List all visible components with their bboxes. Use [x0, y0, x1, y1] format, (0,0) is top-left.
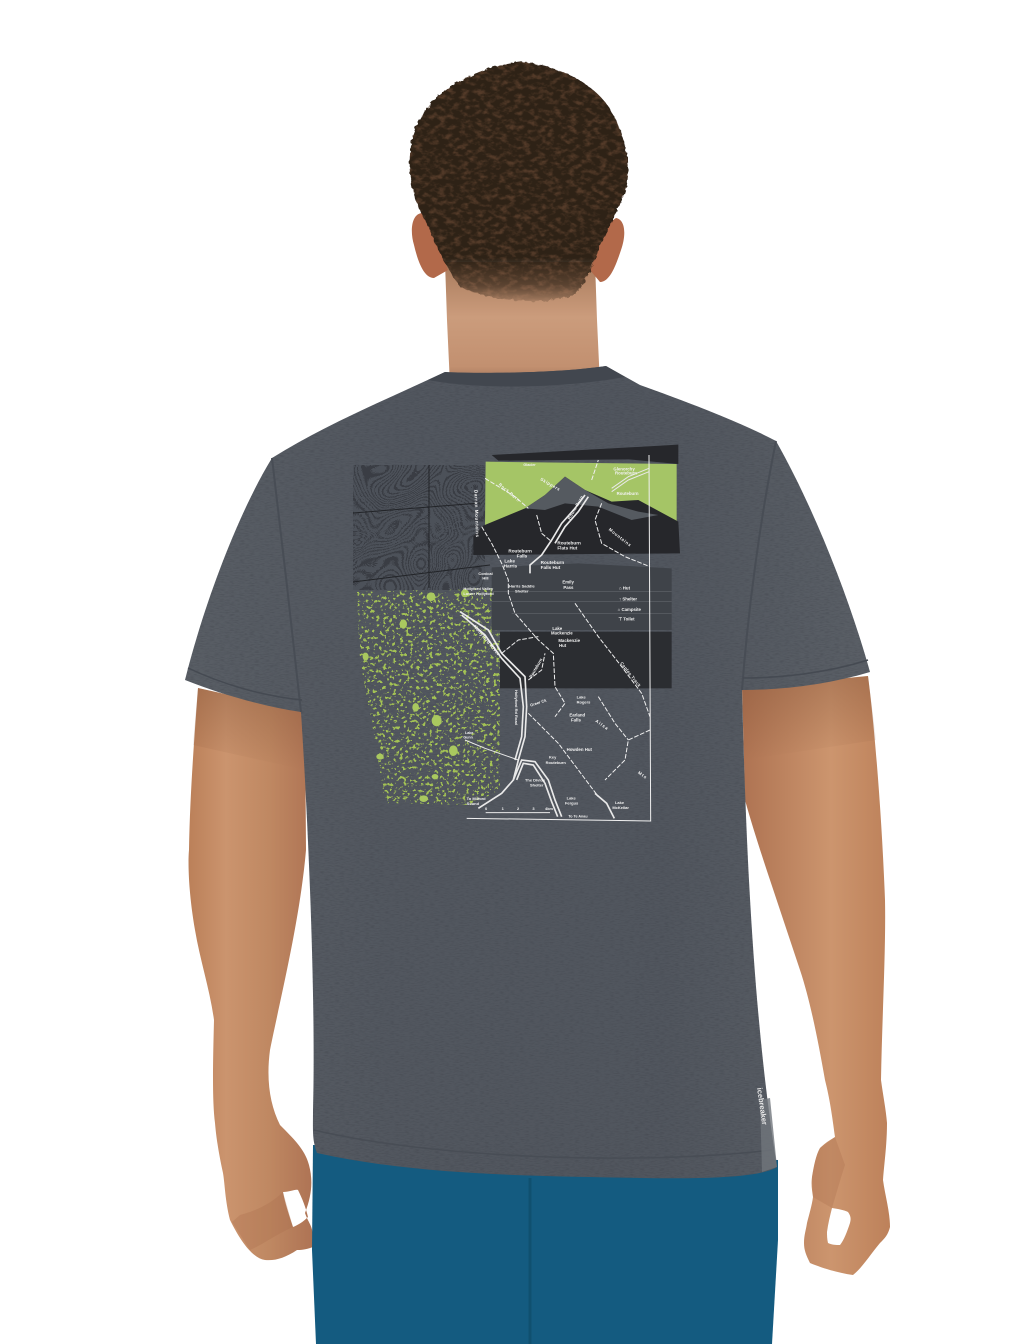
right arm — [742, 676, 890, 1275]
map labels: Mts — [637, 770, 649, 780]
map labels: Skippers — [539, 477, 561, 492]
map labels: Routeburn — [528, 657, 544, 679]
map labels: McKellar — [612, 805, 629, 810]
fabric texture — [180, 360, 880, 1185]
map labels: Glacier — [523, 463, 536, 467]
side label: icebreaker — [755, 1087, 769, 1126]
black brush stroke — [492, 445, 678, 464]
map labels: Mackenzie — [558, 638, 581, 643]
map labels: Hut — [559, 643, 567, 648]
map labels: 3 — [532, 806, 535, 811]
map labels: Lower Hollyford — [463, 591, 494, 596]
sleeve seams — [272, 441, 776, 712]
map labels: Shelter — [515, 588, 529, 593]
shorts — [312, 1145, 778, 1344]
map labels: Mackenzie — [551, 631, 573, 636]
right hand shading — [812, 1137, 845, 1208]
shorts seam — [528, 1178, 532, 1344]
map labels: ⌂ Campsite — [618, 607, 642, 612]
map labels: Route Burn — [567, 495, 584, 520]
map labels: Howden Hut — [567, 747, 592, 752]
scale bar — [486, 811, 550, 814]
map labels: Hollyford River — [473, 624, 501, 657]
map labels: Routeburn — [615, 470, 637, 475]
left arm — [189, 688, 313, 1260]
map labels: Earland — [569, 712, 586, 717]
map labels: To Milford — [467, 796, 486, 801]
map labels: Lake — [552, 626, 563, 631]
map labels: Mountains — [608, 527, 633, 548]
map labels: Routeburn — [546, 760, 566, 765]
hem stitch — [314, 1130, 772, 1158]
map labels: Falls — [517, 553, 528, 558]
map labels: Routeburn — [508, 549, 532, 554]
map labels — [463, 463, 649, 818]
map labels: ⌂ Hut — [619, 586, 631, 591]
left hand shading — [232, 1192, 293, 1250]
neck — [445, 262, 600, 385]
green speckle panel — [355, 588, 503, 806]
t-shirt — [180, 360, 880, 1185]
map labels: Lake — [567, 795, 577, 800]
green sky panel — [485, 462, 677, 527]
printed graphic — [353, 445, 680, 821]
map labels: Harris Saddle — [509, 584, 535, 589]
map labels: Greer Ck — [529, 697, 548, 708]
rivers — [460, 468, 649, 818]
hair — [408, 61, 629, 302]
map labels: Hollyford Valley — [463, 586, 494, 591]
map labels: 1 — [502, 806, 505, 811]
map labels: 2 — [517, 806, 520, 811]
map labels: Key — [549, 754, 557, 759]
map labels: Glenorchy — [613, 467, 635, 472]
map labels: Emily — [562, 580, 574, 585]
map labels: Routeburn — [617, 491, 639, 496]
right arm sleeve shadow — [742, 676, 876, 760]
dashed tracks — [482, 460, 650, 797]
map labels: The Divide — [525, 777, 546, 782]
hair texture — [410, 62, 628, 300]
map labels: Darran Mountains — [473, 490, 480, 538]
map labels: Ailsa — [594, 718, 610, 731]
topographic panel — [353, 465, 490, 590]
map labels: Falls — [571, 718, 581, 723]
side panel — [760, 1098, 777, 1172]
map labels: Lake — [615, 800, 625, 805]
map labels: Fergus — [565, 800, 579, 805]
map labels: Pass — [563, 585, 574, 590]
map labels: Conical — [478, 571, 493, 576]
map labels: Falls Hut — [541, 565, 561, 570]
white frame rule — [467, 455, 651, 821]
left arm sleeve shadow — [193, 688, 305, 770]
map labels: Routeburn — [541, 560, 564, 565]
ear right — [590, 218, 624, 282]
grey striped band — [492, 563, 672, 630]
map labels: To Te Anau — [568, 814, 588, 818]
map labels: Lake — [577, 694, 587, 699]
map labels: Gunn — [463, 736, 473, 740]
dark band — [500, 632, 672, 688]
map labels: Lake — [504, 559, 515, 564]
map labels: Flats Hut — [557, 545, 578, 550]
map labels: Hollyford Rd Road — [514, 690, 519, 726]
map labels: Harris — [504, 563, 518, 568]
map labels: Shelter — [530, 783, 544, 788]
map labels: Lake — [465, 731, 473, 735]
map labels: ⊤ Toilet — [618, 617, 635, 622]
collar — [428, 366, 625, 386]
map labels: Sound — [467, 801, 480, 806]
map labels: Rogers — [577, 699, 591, 704]
map labels: 4km — [545, 806, 553, 811]
larger green blobs — [363, 589, 469, 802]
map labels: Caples Track — [619, 661, 642, 688]
map labels: Routeburn — [557, 540, 581, 545]
map labels: Hill — [482, 576, 489, 581]
mountain — [473, 477, 680, 555]
map labels: 0 — [485, 806, 488, 811]
sleeve hems — [188, 660, 868, 700]
ear left — [412, 213, 448, 278]
map labels: ↑ Shelter — [619, 596, 637, 601]
map labels: Rock Burn — [498, 482, 521, 503]
